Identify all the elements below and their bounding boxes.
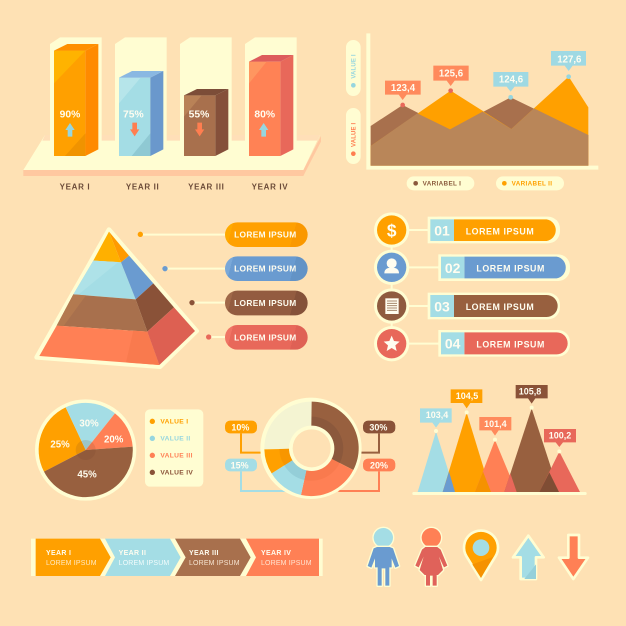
- step: year I: YEAR I: [46, 550, 71, 557]
- pill: orange: [225, 222, 308, 247]
- panel: numbered list: [374, 212, 570, 361]
- bar: year II: [119, 71, 163, 156]
- icon: location pin: [464, 531, 498, 580]
- bar: year III: [184, 89, 228, 156]
- callout: 124,6: 124,6: [499, 74, 524, 85]
- year labels: YEAR III: [188, 182, 225, 191]
- icon: man: [368, 528, 399, 586]
- callout: 105,8: [516, 385, 548, 410]
- pie: 45%: [77, 470, 97, 481]
- callout: 125,6: 125,6: [439, 69, 464, 80]
- pie: [35, 399, 136, 501]
- legend: VALUE III: [160, 453, 193, 460]
- triangles: [418, 408, 580, 492]
- step: year II: [105, 539, 181, 576]
- row 03: [374, 288, 560, 324]
- icon: arrow down: [559, 535, 588, 579]
- pill: blue: [225, 256, 308, 281]
- row 03: LOREM IPSUM: [466, 302, 534, 312]
- step: year IV: LOREM IPSUM: [261, 560, 312, 567]
- label: 10%: 10%: [231, 422, 249, 432]
- label: 20%: [363, 459, 395, 471]
- callout: 123,4: 123,4: [391, 83, 416, 94]
- step: year II: YEAR II: [119, 550, 146, 557]
- axes: [368, 33, 598, 168]
- pill: red: [225, 325, 308, 350]
- label: 30%: 30%: [369, 422, 387, 432]
- row 01: 01: [434, 223, 450, 239]
- pill: brown: [225, 291, 308, 315]
- label: 15%: 15%: [231, 460, 249, 470]
- legend: VARIABEL II: [512, 181, 552, 188]
- bar: year I: 90%: [60, 109, 80, 120]
- pill: brown: LOREM IPSUM: [234, 298, 297, 308]
- leader lines: [241, 433, 379, 491]
- row 04: LOREM IPSUM: [476, 339, 545, 349]
- pie: 20%: [104, 434, 124, 445]
- step: year II: LOREM IPSUM: [119, 560, 169, 567]
- legend: VALUE I: [160, 419, 188, 426]
- platform: [23, 37, 321, 176]
- label: 10%: [225, 421, 257, 433]
- legend: VALUE IV: [160, 470, 193, 477]
- pill: blue: LOREM IPSUM: [234, 264, 297, 274]
- value axis pills: VALUE I: [352, 54, 358, 79]
- legend: [407, 176, 564, 190]
- row 01: $: [387, 220, 397, 240]
- legend: VALUE II: [160, 436, 191, 443]
- area series: [371, 77, 588, 166]
- callout: 127,6: [551, 51, 586, 79]
- connector lines: [138, 232, 225, 340]
- year labels: YEAR I: [60, 182, 90, 191]
- step: year IV: YEAR IV: [261, 550, 291, 557]
- pyramid shape: [37, 230, 197, 367]
- bar: year IV: 80%: [254, 109, 275, 120]
- callout: 103,4: [420, 408, 452, 433]
- icon: arrow up: [513, 536, 544, 579]
- pill: red: LOREM IPSUM: [234, 332, 297, 342]
- bar: year II: 75%: [123, 109, 144, 120]
- label: 15%: [225, 459, 257, 471]
- year labels: [60, 182, 288, 191]
- step: year I: LOREM IPSUM: [46, 560, 97, 567]
- callout: 127,6: 127,6: [557, 54, 582, 65]
- pie: 25%: [50, 440, 70, 451]
- row 04: [374, 326, 570, 361]
- row 02: LOREM IPSUM: [476, 263, 545, 273]
- panel: pie chart: [35, 399, 203, 501]
- callout: 100,2: 100,2: [549, 431, 571, 441]
- donut: [260, 398, 362, 499]
- pie: 30%: [79, 418, 99, 429]
- row 02: [374, 250, 570, 285]
- legend: [145, 409, 203, 487]
- panel: 3D bar chart: [23, 37, 321, 191]
- step: year IV: [246, 539, 319, 576]
- row 02: 02: [445, 260, 461, 276]
- year labels: YEAR IV: [252, 182, 288, 191]
- panel: area chart: [346, 33, 598, 190]
- baseline: [412, 492, 587, 495]
- callout: 100,2: [544, 429, 576, 453]
- value axis pills: [346, 40, 361, 164]
- callout: 101,4: 101,4: [484, 419, 507, 429]
- callout: 105,8: 105,8: [519, 387, 541, 397]
- row 03: 03: [434, 298, 450, 314]
- step: year I: [36, 539, 111, 576]
- bar: year IV: [249, 55, 293, 156]
- callout: 103,4: 103,4: [426, 410, 448, 420]
- year labels: YEAR II: [126, 182, 159, 191]
- callout: 123,4: [385, 81, 421, 107]
- panel: donut chart: [225, 398, 395, 499]
- step: year III: LOREM IPSUM: [189, 560, 240, 567]
- callout: 124,6: [493, 72, 528, 100]
- icon: woman: [415, 528, 447, 586]
- step: year III: YEAR III: [189, 550, 219, 557]
- value axis pills: VALUE I: [352, 122, 358, 147]
- row 01: [374, 212, 560, 248]
- label: 30%: [363, 421, 395, 433]
- panel: pyramid: [37, 222, 308, 367]
- callout: 104,5: [451, 389, 482, 414]
- connectors: [392, 230, 439, 344]
- pill: orange: LOREM IPSUM: [234, 230, 297, 240]
- panel: chevron timeline: [31, 539, 323, 576]
- strip background: [31, 539, 323, 576]
- row 01: LOREM IPSUM: [466, 226, 534, 236]
- callout: 101,4: [479, 417, 511, 442]
- label: 20%: 20%: [370, 460, 388, 470]
- legend: VARIABEL I: [423, 181, 461, 188]
- step: year III: [175, 539, 251, 576]
- bar: year I: [54, 44, 98, 156]
- panel: icons: [368, 528, 588, 586]
- callout: 104,5: 104,5: [456, 391, 478, 401]
- bar: year III: 55%: [189, 109, 209, 120]
- panel: triangle chart: [412, 385, 587, 495]
- row 04: 04: [445, 336, 461, 352]
- callout: 125,6: [433, 66, 469, 93]
